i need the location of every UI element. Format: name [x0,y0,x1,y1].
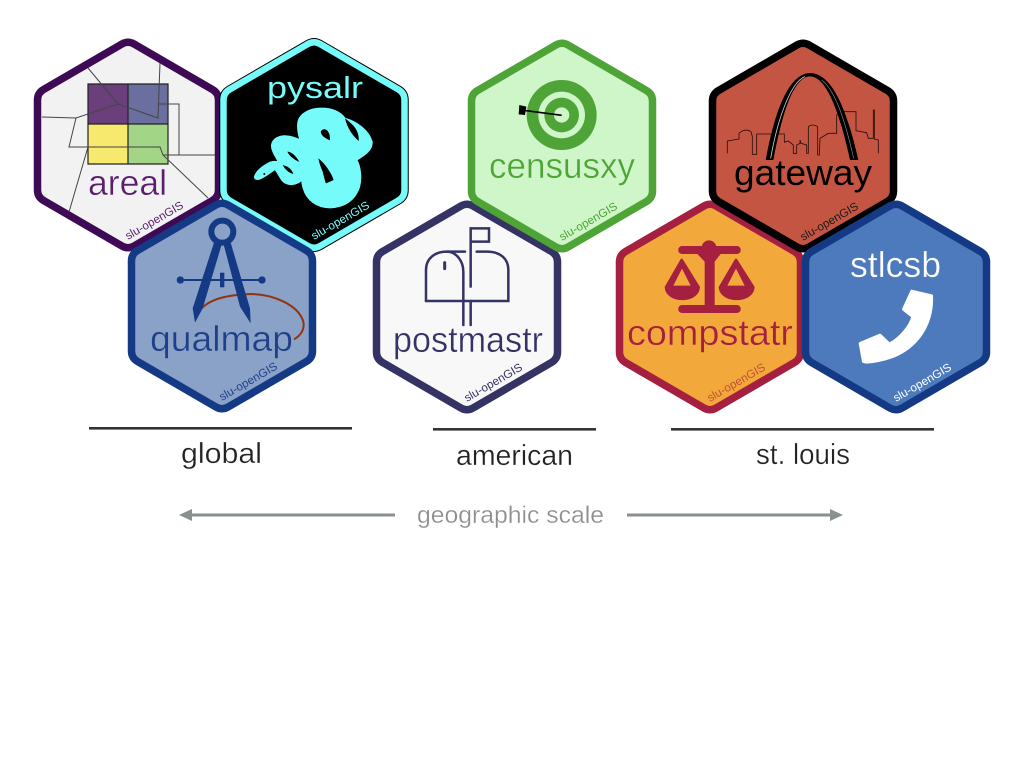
org label: slu-openGIS [124,200,186,243]
org label: slu-openGIS [462,362,525,405]
org label: slu-openGIS [310,200,372,243]
icon: scales of justice [666,240,753,313]
hex badge: censusxy [472,43,652,249]
arrow: toward global [179,509,395,521]
org label: slu-openGIS [892,362,954,405]
badge shape [38,42,218,248]
package name: areal [88,162,167,203]
arrow: toward st. louis [627,509,843,521]
org label: slu-openGIS [706,362,768,405]
package name: censusxy [489,145,635,186]
badge shape [132,203,312,409]
group rule: american [433,428,596,431]
badge shape [224,42,404,248]
badge shape [620,204,800,410]
badge shape [806,204,986,410]
group rule: st. louis [671,428,934,431]
group label: american: american [456,440,573,472]
group rule: global [89,427,352,430]
hex badge: postmastr [376,204,558,410]
hex badge: compstatr [620,204,800,410]
package name: stlcsb [850,244,941,285]
org label: slu-openGIS [218,361,280,404]
badge shape [472,43,652,249]
org label: slu-openGIS [558,201,620,244]
package name: qualmap [150,318,293,359]
hex badge: areal [38,42,218,248]
hex badge: qualmap [132,203,312,409]
icon: snake [255,108,372,208]
hex badge: gateway [712,43,894,249]
icon: bivariate map grid [42,63,215,212]
icon: mailbox [426,228,508,325]
org label: slu-openGIS [798,201,861,244]
icon: target with dart [519,80,597,150]
package name: pysalr [267,70,363,105]
group label: global: global [181,438,262,470]
icon: telephone handset [860,291,932,362]
badge shape [712,43,894,249]
badge shape [376,204,558,410]
package name: postmastr [393,319,543,360]
group label: st. louis: st. louis [756,439,850,471]
hex badge: pysalr [224,42,404,248]
hex badge: stlcsb [806,204,986,410]
package name: gateway [734,152,872,193]
axis label: geographic scale: geographic scale [417,502,604,529]
icon: arch and skyline [727,73,878,160]
icon: drafting compass [177,221,304,339]
package name: compstatr [627,312,793,353]
